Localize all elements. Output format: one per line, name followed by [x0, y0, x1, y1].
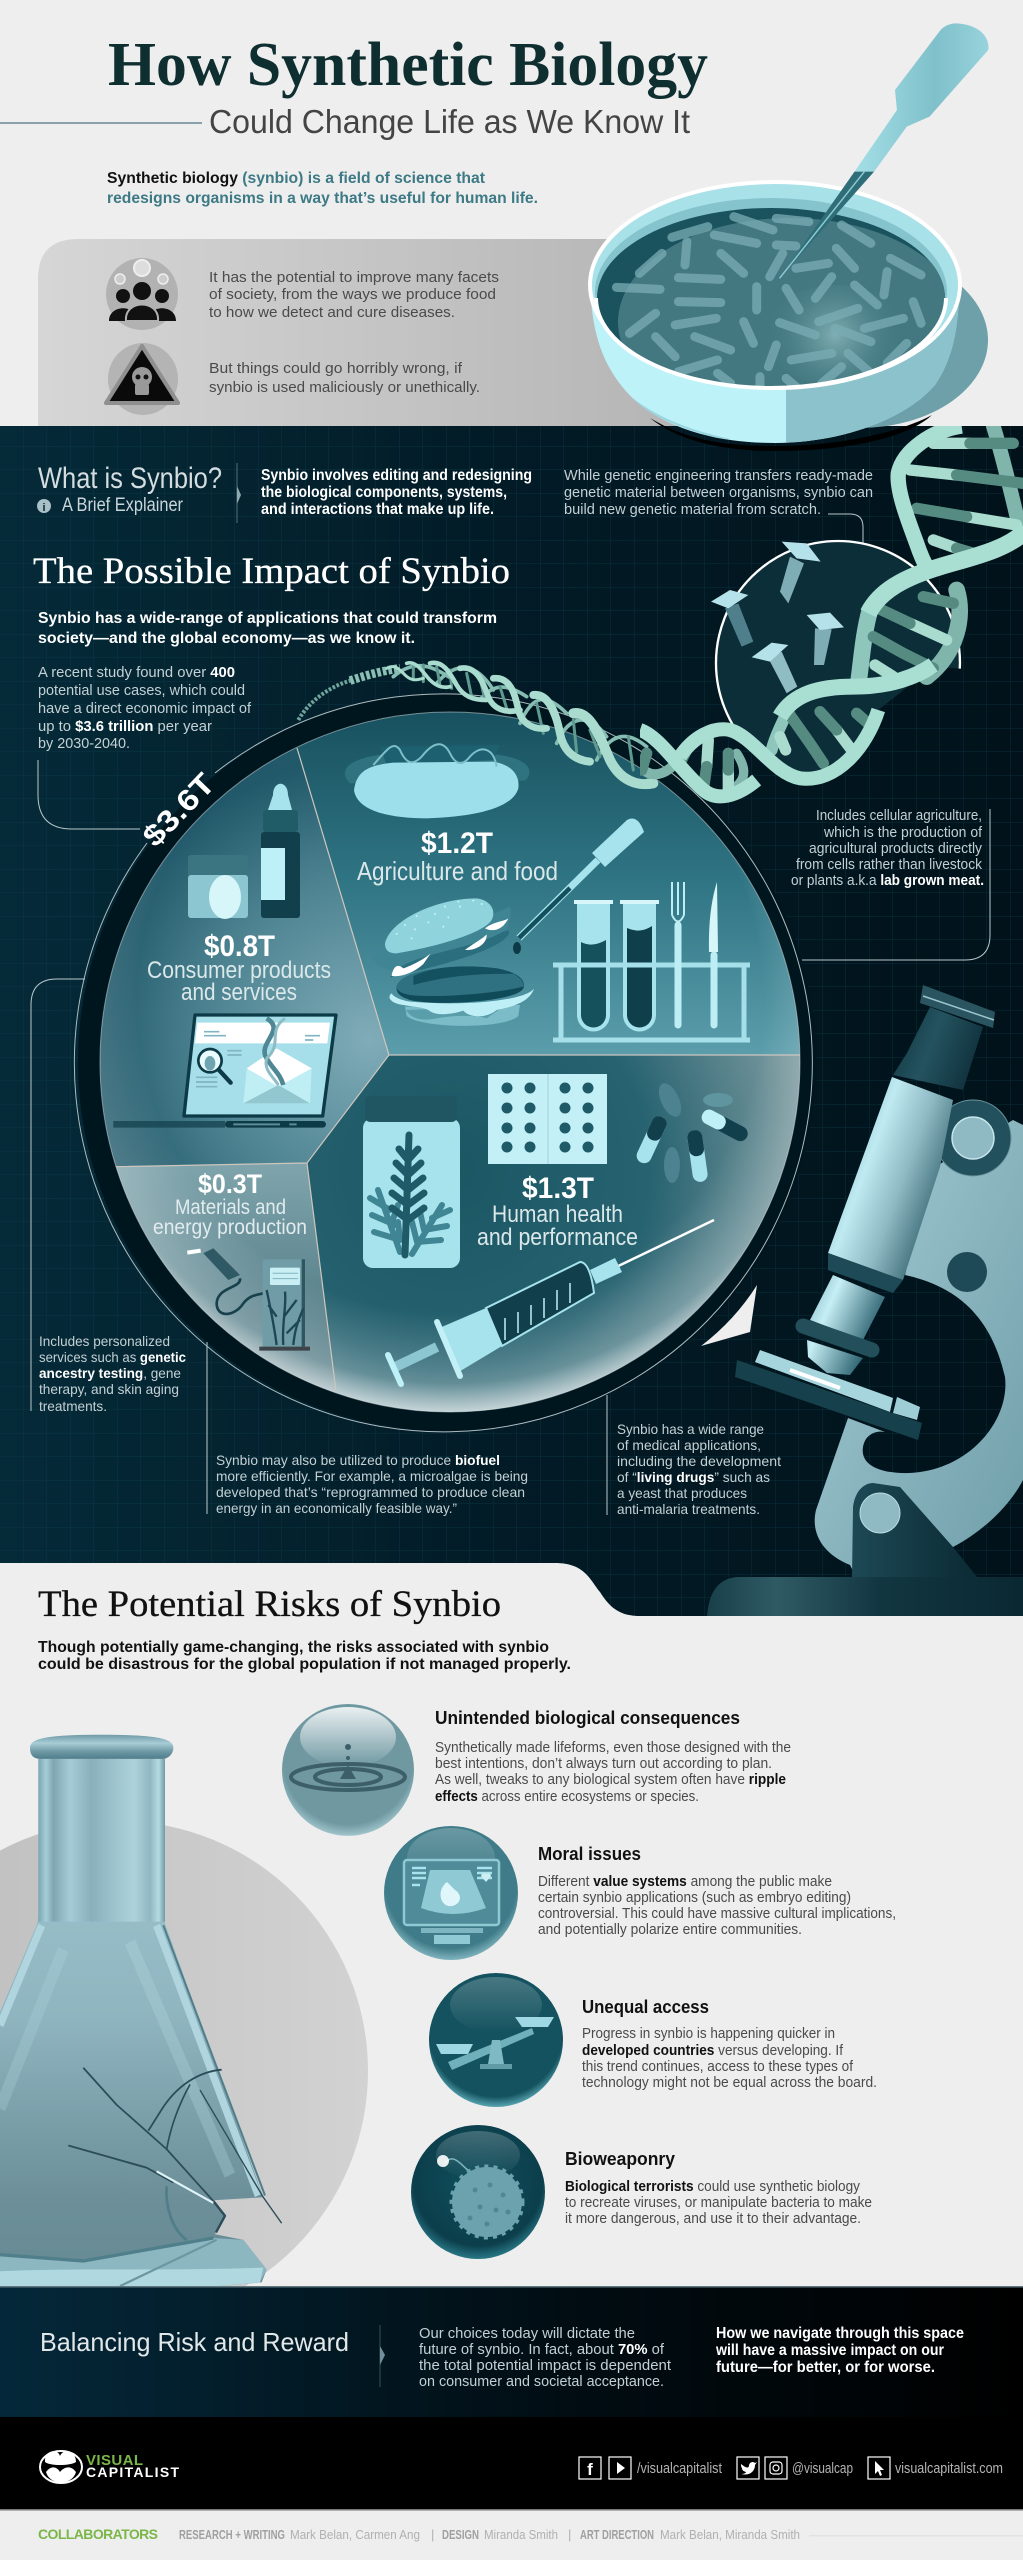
illustration: magnified DNA circle and double helix: [640, 426, 1023, 796]
risk 3: unequal access: [429, 1973, 877, 2107]
text: synbio definition: and interactions that make up life.: [261, 501, 494, 518]
social glyphs: [587, 2460, 884, 2479]
text: synbio definition: Synbio involves editing and redesigning: [261, 467, 532, 484]
body text: best intentions, don’t always turn out according to plan.: [435, 1755, 772, 1772]
body text: [582, 2025, 877, 2091]
text: synbio definition: the biological components, systems,: [261, 484, 507, 501]
risk 1: unintended consequences: Unintended biological consequences: [435, 1708, 740, 1728]
social glyphs: f: [587, 2460, 593, 2479]
label: human health: [477, 1172, 638, 1251]
label: consumer products: [147, 930, 331, 1006]
body text: Different value systems among the public make: [538, 1873, 832, 1890]
text: recent study callout: up to $3.6 trillion per year: [38, 718, 212, 735]
social handles: [637, 2460, 1003, 2477]
label: human health: $1.3T: [522, 1172, 594, 1205]
icon: plant jar: [363, 1096, 460, 1268]
text: potential: [209, 269, 499, 321]
text: recent study callout: A recent study found over 400: [38, 664, 235, 681]
nucleotides: [711, 542, 844, 693]
icon: burger: [373, 898, 534, 1026]
callout pointer: [701, 1285, 757, 1346]
text: risks intro: could be disastrous for the global population if not managed properly.: [38, 1656, 571, 1673]
body text: and potentially polarize entire communities.: [538, 1921, 802, 1938]
illustration: broken flask: [0, 1735, 368, 2321]
icon: virus bomb sphere: [411, 2125, 545, 2259]
icon: biofuel pump: [187, 1248, 310, 1351]
icon: ultrasound sphere: [384, 1826, 518, 1960]
label: agriculture and food: [357, 827, 558, 886]
collaborators credits: Mark Belan, Carmen Ang: [290, 2527, 420, 2542]
text: genetic engineering comparison: build new genetic material from scratch.: [564, 501, 821, 518]
label: materials and energy: [153, 1169, 307, 1239]
risk 4: bioweaponry: [411, 2125, 872, 2259]
intro text: [107, 170, 538, 207]
text: recent study callout: have a direct economic impact of: [38, 700, 252, 717]
base pairs: [642, 443, 1023, 793]
risk 3: unequal access: Unequal access: [582, 1997, 709, 2017]
icon: syringe: [388, 1220, 714, 1384]
text: danger: synbio is used maliciously or unethically.: [209, 379, 480, 396]
text: danger: [209, 360, 480, 396]
body text: Progress in synbio is happening quicker in: [582, 2025, 835, 2042]
body text: effects across entire ecosystems or species.: [435, 1788, 699, 1805]
risk 4: bioweaponry: Bioweaponry: [565, 2149, 675, 2169]
text: cellular agriculture callout: from cells rather than livestock: [796, 857, 983, 873]
text: conclusion: [715, 2325, 964, 2376]
logo: CAPITALIST: [86, 2464, 179, 2480]
text: choices: the total potential impact is dependent: [419, 2357, 672, 2374]
text: genetic engineering comparison: While genetic engineering transfers ready-made: [564, 467, 873, 484]
label: consumer products: $0.8T: [204, 930, 275, 963]
collaborators credits: DESIGN: [442, 2527, 479, 2542]
social links: [579, 2457, 890, 2479]
text: cellular agriculture callout: agricultural products directly: [809, 841, 983, 857]
icon: fork and knife: [672, 882, 718, 1025]
risk 2: moral issues: Moral issues: [538, 1844, 641, 1864]
title: [0, 31, 708, 140]
segment: consumer products: [100, 747, 388, 1166]
pipette: [780, 23, 988, 278]
label: consumer products: and services: [181, 979, 297, 1006]
body tube: [803, 1077, 953, 1375]
text: choices: [419, 2325, 672, 2390]
icon: small DNA helix: [298, 663, 653, 784]
text: cellular agriculture callout: Includes cellular agriculture,: [816, 808, 982, 824]
label: materials and energy: $0.3T: [198, 1169, 262, 1199]
label: agriculture and food: Agriculture and food: [357, 856, 558, 886]
foot: [707, 1483, 1023, 1616]
heading: possible impact: The Possible Impact of Synbio: [33, 551, 510, 592]
panel: balancing risk and reward: [0, 2286, 1023, 2417]
body text: it more dangerous, and use it to their advantage.: [565, 2210, 861, 2227]
what is synbio header: [37, 462, 241, 523]
cells: [616, 217, 921, 387]
label: human health: and performance: [477, 1224, 638, 1251]
stage: [735, 1350, 922, 1440]
title: Could Change Life as We Know It: [209, 103, 690, 140]
icon: info: i: [42, 502, 46, 514]
text: potential: It has the potential to improve many facets: [209, 269, 499, 286]
icon: test tubes and rack: [553, 902, 750, 1040]
cracks: [0, 2068, 282, 2261]
icon: hot dog: [345, 744, 529, 818]
text: genetic engineering comparison: genetic material between organisms, synbio can: [564, 484, 873, 501]
text: recent study callout: [38, 664, 252, 829]
body text: certain synbio applications (such as embryo editing): [538, 1889, 851, 1906]
icon: petri dish with pipette: [590, 23, 988, 451]
panel: potential and danger: [38, 239, 700, 426]
text: biofuel callout: energy in an economically feasible way.”: [216, 1500, 457, 1516]
icon: scale sphere: [429, 1973, 563, 2107]
text: impact intro: society—and the global economy—as we know it.: [38, 630, 415, 647]
body text: controversial. This could have massive cultural implications,: [538, 1905, 896, 1922]
text: biofuel callout: Synbio may also be utilized to produce biofuel: [216, 1452, 500, 1468]
text: personalized services callout: ancestry testing, gene: [39, 1365, 181, 1381]
illustration: microscope: [707, 985, 1023, 1616]
text: choices: future of synbio. In fact, about 70% of: [419, 2341, 665, 2358]
panel: dark impact section background: [0, 426, 1023, 1616]
eyepiece: [893, 985, 995, 1090]
text: cellular agriculture callout: which is the production of: [823, 825, 983, 841]
body text: developed countries versus developing. If: [582, 2042, 844, 2059]
text: conclusion: will have a massive impact on our: [715, 2342, 944, 2359]
collaborators credits: |: [431, 2527, 434, 2542]
what is synbio header: A Brief Explainer: [62, 495, 184, 516]
text: medical callout: including the development: [617, 1453, 781, 1469]
text: genetic engineering comparison: [564, 467, 873, 543]
text: cellular agriculture callout: [791, 808, 990, 960]
icon: droplet ripple sphere: [282, 1704, 414, 1836]
label: consumer products: Consumer products: [147, 957, 331, 984]
icon: blister pack: [488, 1074, 607, 1164]
text: conclusion: How we navigate through this space: [716, 2325, 964, 2342]
heading: potential risks: The Potential Risks of Synbio: [38, 1584, 501, 1625]
collaborators credits: |: [568, 2527, 571, 2542]
text: personalized services callout: [31, 979, 186, 1414]
panel: footer: [0, 2417, 1023, 2510]
body text: technology might not be equal across the board.: [582, 2074, 877, 2091]
text: impact intro: Synbio has a wide-range of applications that could transform: [38, 610, 497, 627]
text: biofuel callout: [207, 1342, 528, 1516]
knob: [947, 1252, 987, 1292]
collaborators credits: RESEARCH + WRITING: [179, 2527, 285, 2542]
segment: materials and energy: [116, 1164, 336, 1393]
collaborators credits: Miranda Smith: [484, 2527, 558, 2542]
body text: this trend continues, access to these types of: [582, 2058, 854, 2075]
collaborators credits: Mark Belan, Miranda Smith: [660, 2527, 800, 2542]
text: risks intro: [38, 1639, 571, 1673]
text: cellular agriculture callout: or plants a.k.a lab grown meat.: [791, 873, 984, 889]
text: personalized services callout: therapy, and skin aging: [39, 1381, 179, 1397]
intro text: redesigns organisms in a way that’s useful for human life.: [107, 190, 538, 207]
title: How Synthetic Biology: [108, 31, 708, 99]
label: agriculture and food: $1.2T: [421, 827, 493, 860]
text: potential: of society, from the ways we produce food: [209, 286, 496, 303]
text: biofuel callout: developed that’s “reprogrammed to produce clean: [216, 1484, 525, 1500]
text: synbio definition: [261, 467, 532, 518]
label: materials and energy: energy production: [153, 1216, 307, 1239]
social handles: /visualcapitalist: [637, 2460, 723, 2477]
text: personalized services callout: treatments.: [39, 1398, 107, 1414]
social handles: @visualcap: [792, 2460, 853, 2477]
text: conclusion: future—for better, or for worse.: [716, 2359, 935, 2376]
text: medical callout: a yeast that produces: [617, 1485, 747, 1501]
body text: As well, tweaks to any biological system often have ripple: [435, 1771, 786, 1788]
text: choices: on consumer and societal acceptance.: [419, 2373, 664, 2390]
back strands: [640, 426, 1020, 793]
collaborators credits: [38, 2526, 1023, 2542]
microscope arm: [815, 1120, 1023, 1575]
risk 1: unintended consequences: [282, 1704, 791, 1836]
text: personalized services callout: Includes personalized: [39, 1333, 170, 1349]
body text: [538, 1873, 896, 1938]
icon: laptop with DNA: [113, 1015, 336, 1124]
text: medical callout: anti-malaria treatments.: [617, 1501, 760, 1517]
panel: balancing risk and reward: Balancing Risk and Reward: [40, 2327, 349, 2357]
icon: dropper bottle and jar: [188, 784, 300, 919]
chart: impact by sector disc: [74, 693, 816, 1432]
text: recent study callout: by 2030-2040.: [38, 735, 130, 752]
body text: Synthetically made lifeforms, even those designed with the: [435, 1739, 791, 1756]
pivot ring: [935, 1100, 1011, 1176]
label: total: $3.6T: [137, 767, 222, 854]
icon: info: [37, 499, 51, 514]
panel: risks section background: [0, 1563, 1023, 2287]
text: medical callout: of medical applications,: [617, 1437, 761, 1453]
text: medical callout: of “living drugs” such as: [617, 1469, 770, 1485]
front ribbons: [640, 426, 1023, 796]
body text: [565, 2178, 872, 2227]
collaborators credits: COLLABORATORS: [38, 2526, 158, 2542]
what is synbio header: What is Synbio?: [38, 462, 222, 495]
text: potential: to how we detect and cure diseases.: [209, 304, 455, 321]
segment: agriculture: [297, 700, 810, 1055]
text: impact intro: [38, 610, 497, 647]
text: medical callout: [607, 1395, 781, 1517]
text: choices: Our choices today will dictate the: [419, 2325, 635, 2342]
text: personalized services callout: services such as genetic: [39, 1349, 186, 1365]
body text: [435, 1739, 791, 1805]
icon: skull warning: [106, 343, 178, 415]
body text: to recreate viruses, or manipulate bacteria to make: [565, 2194, 872, 2211]
icon: people: [106, 258, 178, 330]
label: human health: Human health: [492, 1201, 623, 1228]
text: recent study callout: potential use cases, which could: [38, 682, 245, 699]
intro text: Synthetic biology (synbio) is a field of science that: [107, 170, 486, 187]
logo: [40, 2451, 179, 2483]
body text: Biological terrorists could use synthetic biology: [565, 2178, 860, 2195]
icon: pipette: [513, 818, 644, 954]
text: risks intro: Though potentially game-changing, the risks associated with synbio: [38, 1639, 549, 1656]
social handles: visualcapitalist.com: [895, 2460, 1003, 2477]
collaborators credits: ART DIRECTION: [580, 2527, 654, 2542]
label: materials and energy: Materials and: [175, 1196, 286, 1219]
text: medical callout: Synbio has a wide range: [617, 1421, 764, 1437]
text: biofuel callout: more efficiently. For example, a microalgae is being: [216, 1468, 528, 1484]
text: danger: But things could go horribly wrong, if: [209, 360, 463, 377]
segment: human health: [307, 1055, 810, 1420]
icon: capsules and leaves: [634, 1080, 750, 1183]
risk 2: moral issues: [384, 1826, 896, 1960]
logo: VISUAL: [86, 2452, 143, 2469]
